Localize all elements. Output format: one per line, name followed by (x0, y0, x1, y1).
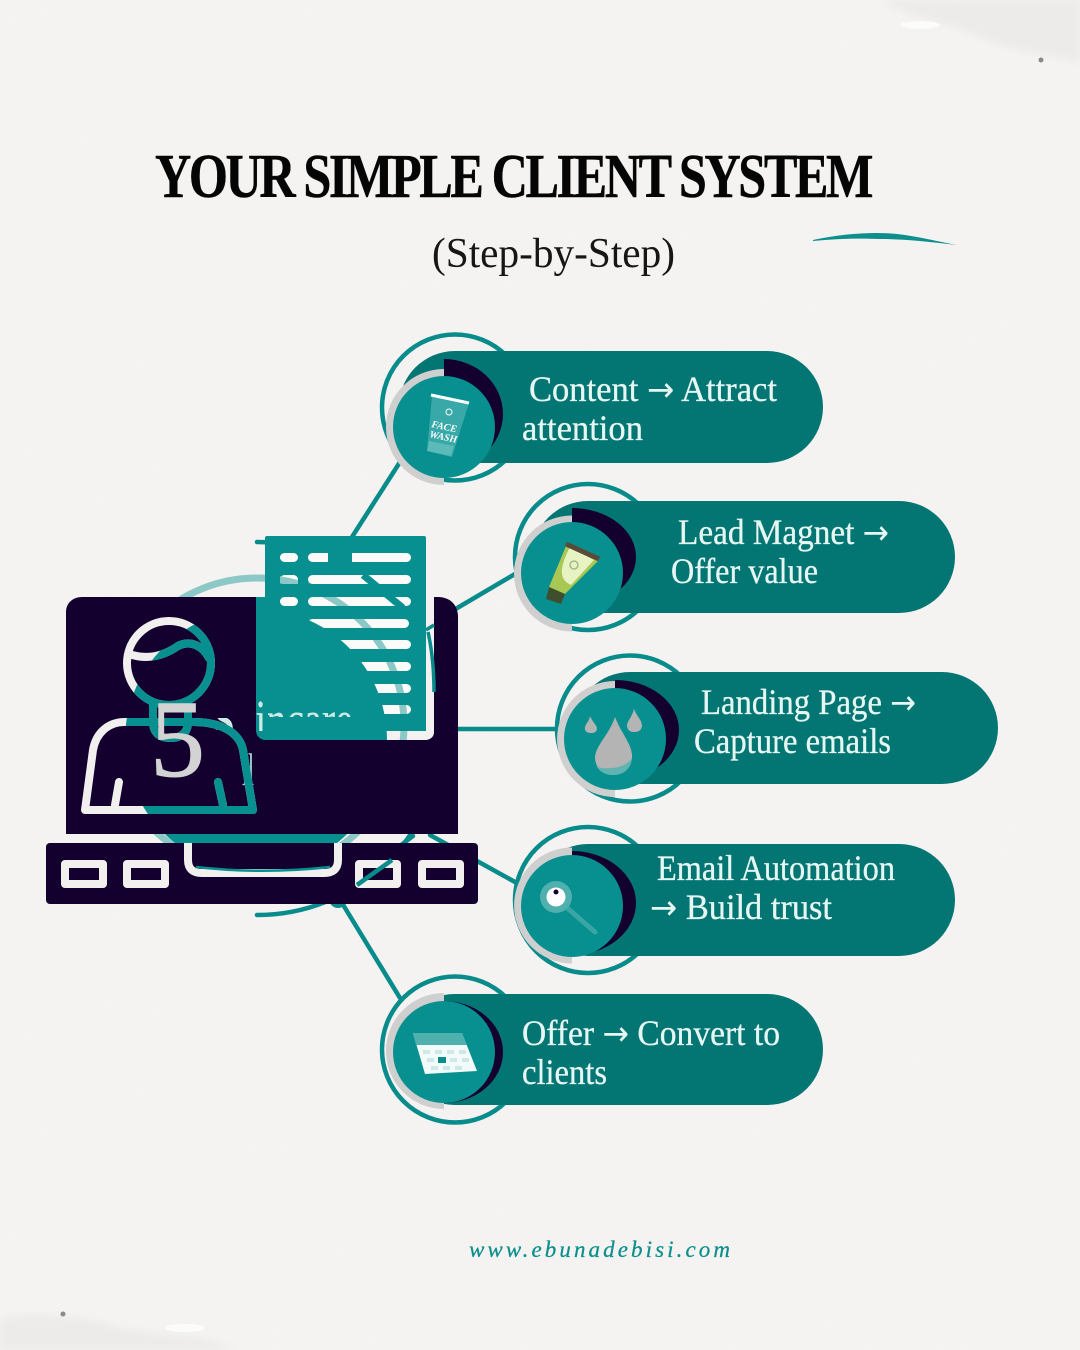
icon disc (393, 1001, 495, 1103)
step 1: content (382, 334, 823, 485)
dark half circle (444, 359, 503, 469)
outer ring (515, 484, 661, 630)
dark half circle (572, 508, 636, 606)
icon: sunscreen tube (546, 544, 599, 604)
label: → Build trust (650, 887, 832, 928)
dark half circle (572, 851, 636, 955)
pill (532, 844, 955, 956)
dark half circle (615, 680, 679, 780)
outer ring (515, 827, 661, 973)
illustration: laptop with person and document: il (242, 744, 254, 795)
label: Capture emails (694, 721, 891, 761)
number five: 5 (150, 678, 205, 800)
subtitle: (Step-by-Step) (432, 231, 675, 277)
teal disc behind laptop (125, 609, 387, 871)
icon: face wash tube: FACE (429, 419, 458, 435)
step 2: lead magnet (514, 484, 955, 632)
label: Lead Magnet → (678, 512, 889, 553)
pale ring behind laptop (110, 578, 404, 872)
icon: water drops (585, 709, 642, 775)
icon: face wash tube (427, 395, 469, 457)
keyboard keys (65, 864, 460, 884)
label (650, 848, 895, 928)
pill (399, 351, 823, 463)
paper texture: bottom left corner (0, 1312, 235, 1350)
illustration: laptop with person and document (46, 536, 478, 908)
website url: www.ebunadebisi.com (469, 1237, 730, 1262)
pill (399, 994, 823, 1105)
document holder (256, 597, 434, 740)
laptop screen (66, 597, 458, 834)
pill (574, 672, 998, 784)
icon: calendar (413, 1033, 477, 1074)
icon disc (521, 855, 623, 957)
outer ring (382, 334, 528, 480)
label (671, 512, 889, 591)
grey half circle (386, 993, 444, 1109)
icon disc (521, 522, 623, 624)
grey half circle (386, 369, 444, 485)
label: Content → Attract (529, 369, 777, 410)
connector lines (257, 462, 558, 998)
grey half circle (557, 681, 615, 797)
connector cuts over document (363, 575, 403, 608)
pill (532, 501, 955, 613)
icon: magnifying glass (540, 881, 595, 932)
icon disc (393, 376, 495, 478)
step 3: landing page (557, 656, 998, 802)
icon disc (564, 688, 666, 790)
person outline (85, 621, 253, 810)
document page (265, 536, 426, 731)
label: clients (522, 1052, 607, 1092)
label (522, 1013, 780, 1092)
outer ring (382, 976, 528, 1122)
teal disc over document (308, 620, 387, 740)
label (522, 369, 777, 448)
dark half circle (444, 1001, 503, 1103)
label: Email Automation (657, 848, 895, 888)
hub knob (329, 890, 347, 908)
label: Offer value (671, 551, 818, 591)
laptop base (46, 843, 478, 904)
laptop trackpad tray (188, 843, 338, 873)
step 5: offer (382, 976, 823, 1122)
partly hidden word: Skincare (213, 688, 353, 753)
grey half circle (514, 516, 572, 632)
decorative swoosh (813, 233, 957, 245)
icon: face wash tube: WASH (428, 429, 459, 446)
title: YOUR SIMPLE CLIENT SYSTEM (155, 143, 872, 211)
paper texture: top right corner (880, 0, 1080, 62)
line crossing keyboard (357, 860, 392, 885)
label (694, 682, 916, 761)
document lines (280, 553, 411, 714)
pale ring over document (280, 576, 408, 740)
label: attention (522, 408, 643, 448)
grey half circle (514, 848, 572, 964)
label: Offer → Convert to (522, 1013, 780, 1054)
step 4: email automation (514, 827, 955, 973)
label: Landing Page → (701, 682, 916, 723)
outer ring (557, 656, 703, 802)
